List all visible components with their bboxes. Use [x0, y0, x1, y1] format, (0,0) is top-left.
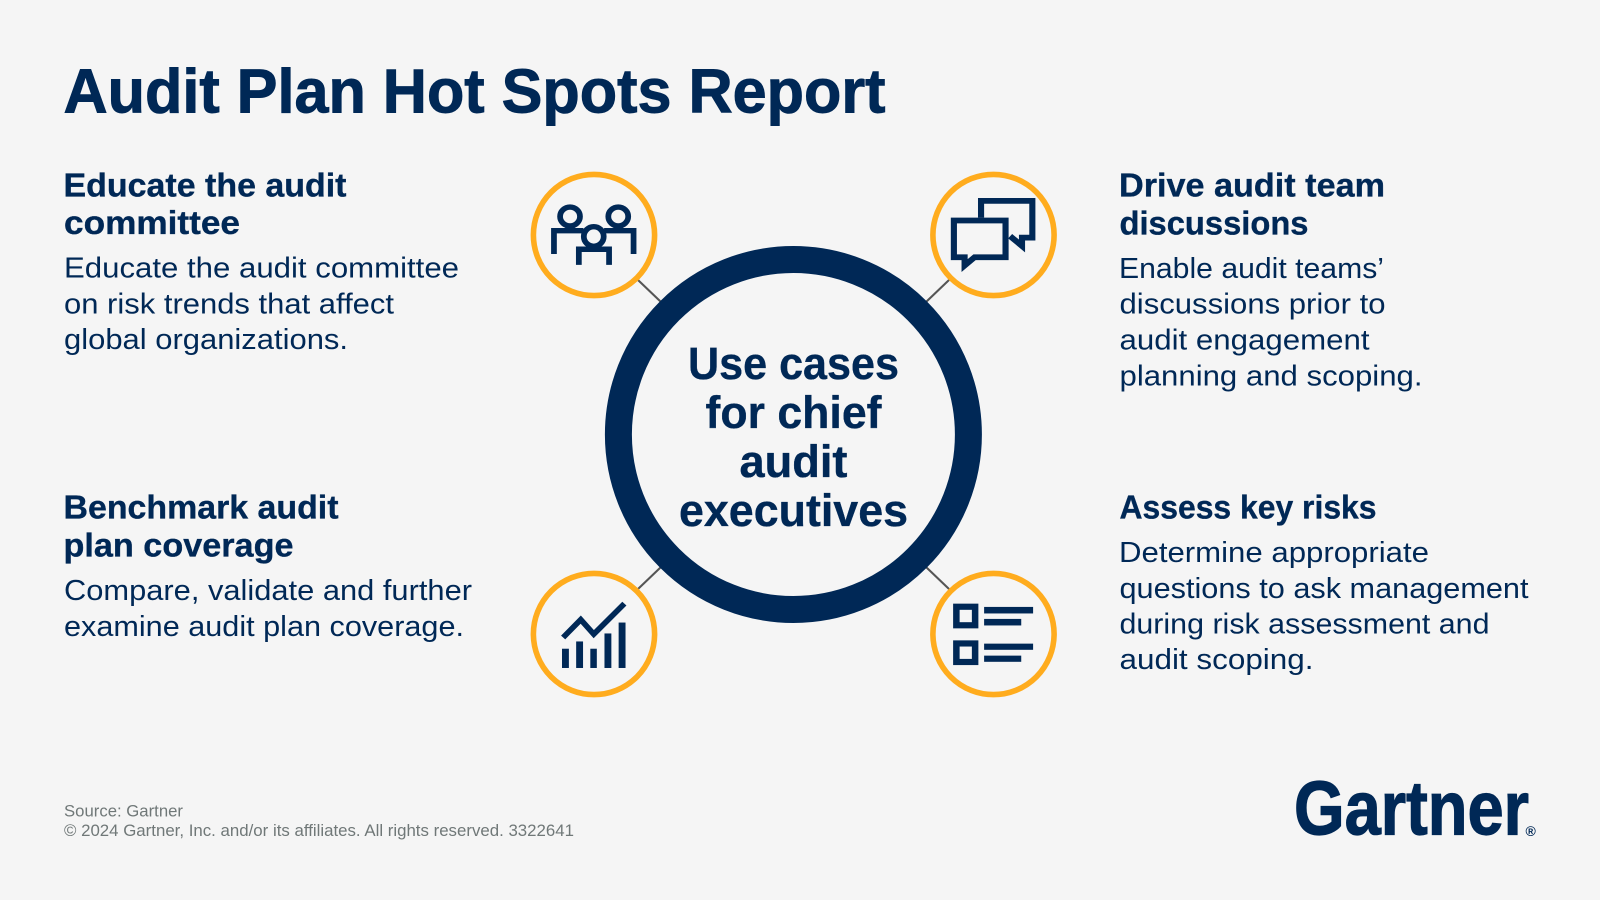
heading: educate the audit committee: committee	[64, 204, 240, 241]
heading: drive audit team discussions: Drive audit team	[1119, 167, 1385, 204]
logo: Gartner: ®	[1526, 823, 1536, 839]
logo: Gartner: Gartner	[1294, 766, 1529, 852]
heading: benchmark audit plan coverage: plan coverage	[64, 527, 294, 564]
body: drive audit team discussions	[1119, 253, 1422, 392]
body: educate the audit committee: Educate the audit committee	[64, 252, 459, 284]
text block: assess key risks	[1119, 489, 1529, 676]
body: drive audit team discussions: planning and scoping.	[1120, 360, 1422, 392]
text block: benchmark audit plan coverage	[64, 489, 473, 643]
icon: checklist	[956, 607, 1033, 662]
body: assess key risks: during risk assessment and	[1120, 608, 1490, 640]
icon ring: chart	[533, 573, 655, 695]
icon ring: checklist	[933, 573, 1054, 695]
source note: Source: Gartner	[64, 803, 184, 821]
body: assess key risks: Determine appropriate	[1119, 537, 1429, 569]
connector lines	[638, 280, 949, 589]
text block: educate the audit committee	[64, 166, 459, 356]
body: educate the audit committee: on risk trends that affect	[64, 288, 394, 320]
body: assess key risks	[1119, 537, 1529, 676]
body: educate the audit committee: global organizations.	[64, 324, 348, 356]
body: benchmark audit plan coverage: Compare, validate and further	[64, 575, 473, 607]
center label: executives	[679, 485, 908, 536]
heading: educate the audit committee: Educate the audit	[64, 166, 347, 203]
icon: chat bubbles	[954, 201, 1032, 266]
center label: Use cases	[688, 338, 899, 389]
center label: for chief	[706, 387, 882, 438]
icon: bar and line chart	[562, 604, 626, 668]
body: assess key risks: questions to ask management	[1120, 573, 1529, 605]
icon ring: people	[533, 174, 655, 296]
body: drive audit team discussions: Enable audit teams’	[1119, 253, 1384, 285]
body: assess key risks: audit scoping.	[1120, 644, 1314, 676]
center label	[679, 338, 908, 536]
icon: people around a table	[554, 207, 634, 265]
body: benchmark audit plan coverage: examine audit plan coverage.	[64, 611, 464, 643]
heading: benchmark audit plan coverage: Benchmark audit	[64, 489, 339, 526]
heading: drive audit team discussions	[1119, 167, 1385, 242]
heading: assess key risks: Assess key risks	[1120, 489, 1376, 526]
text block: drive audit team discussions	[1119, 167, 1422, 392]
body: educate the audit committee	[64, 252, 459, 356]
center label: audit	[740, 436, 848, 487]
diagram: use cases hub	[533, 174, 1054, 695]
icon ring: chat	[933, 174, 1054, 296]
heading: drive audit team discussions: discussions	[1120, 205, 1308, 242]
source note: © 2024 Gartner, Inc. and/or its affiliates. All rights reserved. 3322641	[64, 822, 574, 840]
body: drive audit team discussions: discussions prior to	[1120, 289, 1386, 321]
body: drive audit team discussions: audit engagement	[1120, 324, 1370, 356]
title: Audit Plan Hot Spots Report	[64, 58, 886, 127]
body: benchmark audit plan coverage	[64, 575, 473, 643]
heading: benchmark audit plan coverage	[64, 489, 339, 564]
central ring	[618, 260, 968, 610]
heading: educate the audit committee	[64, 166, 347, 241]
source note	[64, 803, 574, 840]
